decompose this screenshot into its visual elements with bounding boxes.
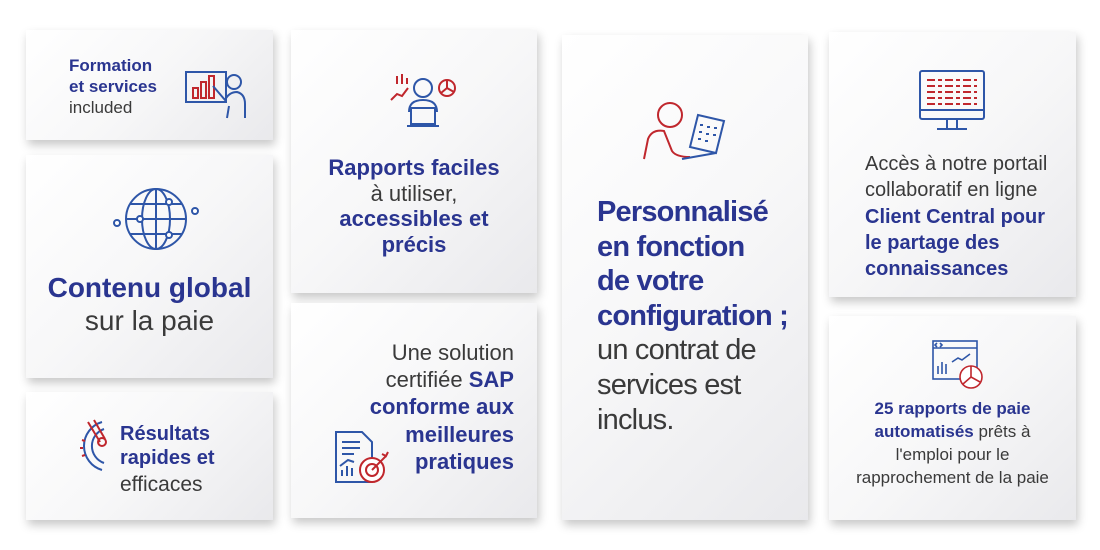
icon: report dashboard [932, 340, 983, 389]
text: formation [69, 56, 157, 117]
text: 25 rapports: 25 rapports de paie [875, 399, 1030, 418]
text: portail: Client Central pour [865, 206, 1045, 228]
text: SAP: meilleures [405, 422, 514, 447]
panel: resultats [26, 392, 273, 520]
icon: document target [335, 431, 389, 483]
panel: solution SAP [291, 303, 537, 518]
text: personnalise: Personnalisé [597, 196, 768, 228]
text: personnalise: en fonction [597, 231, 744, 263]
panel: 25 rapports [829, 316, 1076, 520]
text: personnalise: services est [597, 369, 740, 401]
text: SAP: Une solution [392, 340, 514, 365]
text: rapports: Rapports faciles [328, 155, 500, 180]
icon: globe [113, 188, 199, 250]
text: portail: collaboratif en ligne [865, 179, 1037, 201]
text: formation: included [69, 98, 132, 117]
text: personnalise: un contrat de [597, 334, 756, 366]
text: personnalise: inclus. [597, 404, 674, 436]
icon: presenter [185, 71, 246, 118]
panel: client central [829, 32, 1076, 297]
text: portail: connaissances [865, 258, 1008, 280]
text: SAP: certifiée SAP [386, 367, 514, 392]
icon: person with charts [390, 74, 456, 127]
text: rapports: précis [382, 232, 446, 256]
icon: person at laptop [643, 102, 726, 160]
text: 25 rapports [856, 399, 1049, 487]
text: formation: et services [69, 77, 157, 96]
text: 25 rapports: l'emploi pour le [896, 445, 1009, 464]
text: contenu global [48, 272, 251, 336]
panel: contenu global [26, 155, 273, 378]
text: resultats: Résultats [120, 423, 210, 445]
panel: formation [26, 30, 273, 140]
text: rapports [328, 155, 500, 256]
text: SAP [370, 340, 514, 474]
text: 25 rapports: automatisés prêts à [875, 422, 1030, 441]
icon: monitor [919, 70, 985, 130]
text: SAP: conforme aux [370, 394, 514, 419]
text: resultats: rapides et [120, 447, 214, 469]
text: personnalise: configuration ; [597, 300, 788, 332]
text: personnalise [597, 196, 788, 436]
panel: rapports faciles [291, 30, 537, 293]
text: rapports: à utiliser, [371, 180, 457, 206]
text: personnalise: de votre [597, 265, 703, 297]
icon: gauge [80, 420, 107, 471]
text: portail: le partage des [865, 232, 1000, 254]
panel: resultats: efficaces [120, 473, 202, 496]
text: resultats [120, 423, 214, 469]
text: rapports: accessibles et [339, 206, 489, 231]
panel: personnalise [562, 35, 808, 520]
text: formation: Formation [69, 56, 152, 75]
text: contenu global: Contenu global [48, 272, 251, 303]
text: 25 rapports: rapprochement de la paie [856, 468, 1049, 487]
text: portail [865, 153, 1047, 280]
text: contenu global: sur la paie [85, 305, 214, 336]
text: portail: Accès à notre portail [865, 153, 1047, 175]
text: SAP: pratiques [415, 449, 514, 474]
